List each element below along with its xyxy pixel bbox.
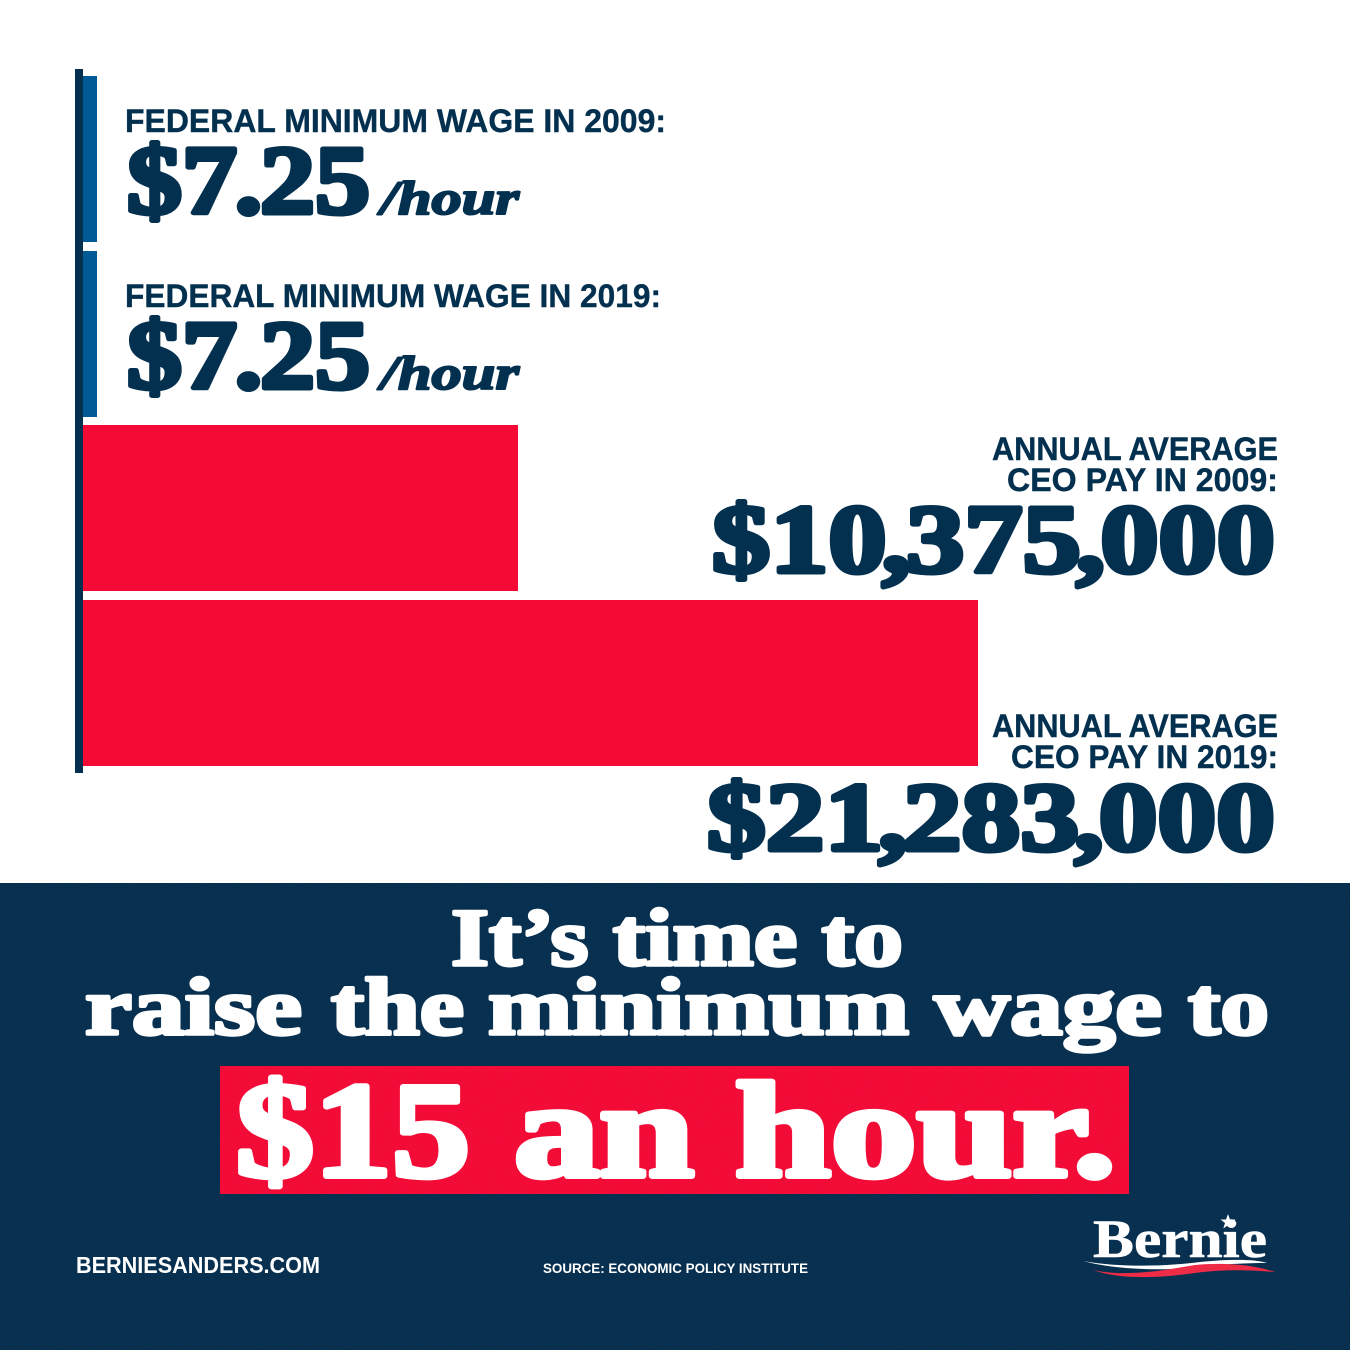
amount: $15: $15 (236, 1056, 470, 1206)
panel: call to action footer (0, 883, 1350, 1350)
label block: CEO pay 2019 (707, 708, 1278, 871)
source: SOURCE: ECONOMIC POLICY INSTITUTE (543, 1261, 808, 1276)
icon: star (1220, 1214, 1236, 1228)
value: $7.25: $7.25 (127, 127, 370, 234)
headline amount (236, 1056, 1116, 1206)
label: annual average: ANNUAL AVERAGE (992, 708, 1278, 744)
label block: minimum wage 2019 (125, 278, 661, 409)
label block: CEO pay 2009 (712, 431, 1278, 593)
word: minimum: minimum (488, 961, 909, 1052)
value: $10,375,000: $10,375,000 (712, 486, 1275, 593)
unit: per hour: /hour (377, 347, 521, 400)
word: to: to (1188, 961, 1269, 1052)
value: $7.25: $7.25 (127, 302, 370, 409)
label: federal minimum wage 2019: FEDERAL MINIMUM WAGE IN 2019: (125, 278, 661, 314)
label: CEO pay in 2009: CEO PAY IN 2009: (1007, 462, 1278, 498)
logo: Bernie (1083, 1209, 1275, 1277)
headline line two (85, 961, 1269, 1052)
bar: minimum wage 2019 (83, 251, 97, 417)
bar: CEO pay 2009 (83, 425, 518, 591)
headline line one: It’s time to (451, 892, 903, 983)
logo wordmark: Bernie (1093, 1209, 1267, 1269)
word: hour.: hour. (735, 1056, 1116, 1206)
word: wage: wage (934, 961, 1162, 1052)
bar: CEO pay 2019 (83, 600, 978, 766)
logo swoosh red (1093, 1264, 1275, 1277)
word: an: an (514, 1056, 694, 1206)
highlight box (220, 1066, 1129, 1194)
navy background (0, 883, 1350, 1350)
label: CEO pay in 2019: CEO PAY IN 2019: (1011, 739, 1278, 775)
label block: minimum wage 2009 (125, 103, 666, 234)
word: the: the (331, 961, 464, 1052)
label: annual average: ANNUAL AVERAGE (992, 431, 1278, 467)
bar chart: wages versus CEO pay (75, 69, 978, 773)
bar: minimum wage 2009 (83, 76, 97, 242)
chart axis (75, 69, 83, 773)
word: raise: raise (85, 961, 302, 1052)
website: BERNIESANDERS.COM (76, 1252, 320, 1278)
unit: per hour: /hour (377, 172, 521, 225)
label: federal minimum wage 2009: FEDERAL MINIMUM WAGE IN 2009: (125, 103, 666, 139)
logo swoosh white (1083, 1260, 1267, 1269)
value: $21,283,000: $21,283,000 (707, 764, 1275, 871)
